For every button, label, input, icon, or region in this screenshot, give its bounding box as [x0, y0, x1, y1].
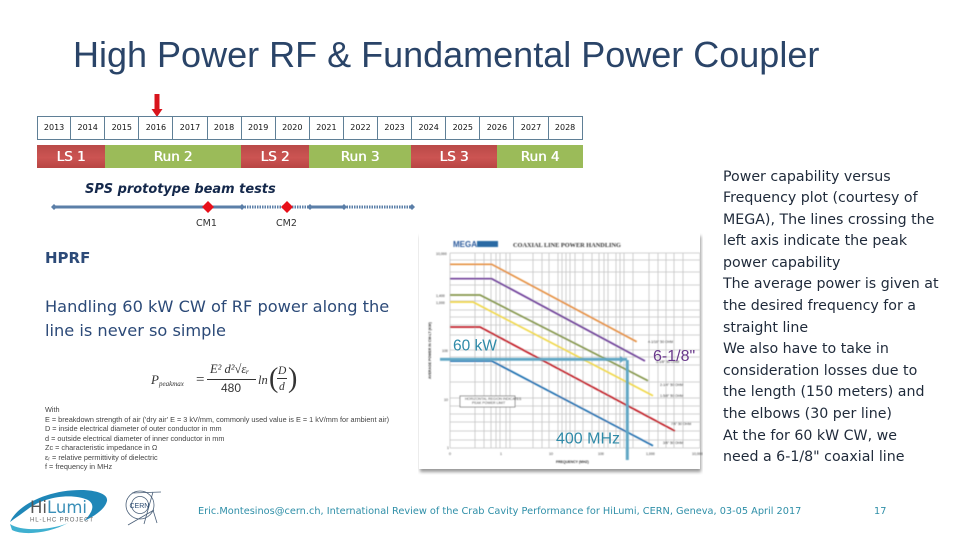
chart: coaxial line power handling: [418, 234, 703, 474]
phase bar: LS and Run periods: [37, 145, 583, 168]
timeline years: 2021: [316, 123, 337, 132]
text: handling statement: [45, 297, 389, 340]
timeline years: 2018: [214, 123, 234, 132]
phase bar: LS and Run periods: Run 2: [154, 149, 192, 165]
text: formula definitions: f = frequency in MHz: [45, 462, 112, 471]
chart: coaxial line power handling: 0: [449, 452, 451, 456]
formula: peak power: ln: [258, 373, 268, 387]
text: power capability description: [722, 168, 939, 465]
phase bar: LS and Run periods: LS 2: [260, 149, 289, 165]
chart: coaxial line power handling: 2-1/4" 50 OHM: [660, 383, 683, 387]
timeline years: 2019: [248, 123, 268, 132]
chart: coaxial line power handling: 10,000: [436, 252, 447, 256]
text: power capability description: left axis indicate the peak: [723, 233, 907, 249]
chart: coaxial line power handling: 400 MHz: [556, 430, 620, 448]
formula: peak power: E² d²√εᵣ: [209, 362, 249, 376]
text: power capability description: the elbows (30 per line): [723, 406, 892, 422]
chart: coaxial line power handling: 3/8" 50 OHM: [663, 441, 683, 445]
phase bar: LS and Run periods: LS 3: [440, 149, 468, 165]
chart: coaxial line power handling: 1: [500, 452, 502, 456]
phase bar: LS and Run periods: Run 4: [521, 149, 559, 165]
formula: peak power: 480: [221, 381, 241, 395]
text: formula definitions: εᵣ = relative permittivity of dielectric: [45, 453, 158, 462]
formula: peak power: [150, 362, 297, 395]
chart: coaxial line power handling: 1,400: [436, 294, 445, 298]
formula: peak power: (: [269, 363, 278, 394]
phase bar: LS and Run periods: LS 1: [56, 149, 85, 165]
chart: coaxial line power handling: 3-1/8" 50 OHM: [656, 360, 679, 364]
text: power capability description: Power capability versus: [723, 168, 891, 184]
label: CM1: CM1: [196, 218, 217, 229]
chart: coaxial line power handling: 100: [442, 349, 448, 353]
chart: coaxial line power handling: 10: [549, 452, 553, 456]
text: formula definitions: d = outside electrical diameter of inner conductor in mm: [45, 434, 224, 443]
arrow: current year marker: [152, 94, 162, 116]
milestone timeline: [51, 201, 415, 213]
timeline years: 2026: [487, 123, 507, 132]
text: formula definitions: [45, 405, 389, 471]
text: power capability description: need a 6-1/8" coaxial line: [723, 449, 904, 465]
chart: coaxial line power handling: COAXIAL LINE POWER HANDLING: [513, 242, 621, 249]
formula: peak power: D: [277, 365, 287, 377]
timeline years: 2020: [282, 123, 302, 132]
text: formula definitions: With: [45, 405, 60, 414]
text: power capability description: We also have to take in: [723, 341, 889, 357]
chart: coaxial line power handling: 10,000: [692, 452, 703, 456]
heading: SPS prototype beam tests: SPS prototype beam tests: [85, 182, 276, 197]
text: handling statement: Handling 60 kW CW of RF power along the: [45, 297, 389, 316]
formula: peak power: ): [288, 363, 297, 394]
text: formula definitions: Zc = characteristic impedance in Ω: [45, 443, 157, 452]
text: handling statement: line is never so simple: [45, 321, 226, 340]
logo: HiLumi: HiLumi: [30, 498, 87, 517]
chart: coaxial line power handling: 4-1/16" 50 OHM: [648, 340, 673, 344]
chart: coaxial line power handling: 6-1/8": [653, 348, 695, 365]
timeline years: 2023: [384, 123, 405, 132]
text: power capability description: consideration losses due to: [723, 363, 917, 379]
timeline years: 2028: [555, 123, 575, 132]
title: High Power RF & Fundamental Power Coupler: [73, 34, 819, 75]
timeline years: 2027: [521, 123, 541, 132]
footer: credit line: Eric.Montesinos@cern.ch, International Review of the Crab Cavity Performance for HiLumi, CERN, Geneva, 03-05 April 2017: [198, 506, 801, 517]
text: power capability description: MEGA), The lines crossing the: [723, 212, 934, 228]
logo: HiLumi: [10, 490, 108, 534]
chart: coaxial line power handling: 10: [444, 398, 448, 402]
formula: peak power: d: [279, 381, 285, 393]
chart: coaxial line power handling: 7/8" 50 OHM: [671, 422, 691, 426]
timeline years: 2014: [78, 123, 98, 132]
text: power capability description: the length (150 meters) and: [723, 384, 924, 400]
chart: coaxial line power handling: 100: [598, 452, 604, 456]
text: power capability description: power capability: [723, 255, 840, 271]
chart: coaxial line power handling: MEGA: [453, 240, 477, 249]
timeline years: 2016: [146, 123, 166, 132]
chart: coaxial line power handling: 1,000: [436, 301, 445, 305]
phase bar: LS and Run periods: Run 3: [341, 149, 379, 165]
timeline years: 2025: [453, 123, 473, 132]
logo: CERN: [126, 490, 161, 526]
timeline years: 2022: [350, 123, 371, 132]
text: power capability description: Frequency plot (courtesy of: [723, 190, 918, 206]
timeline years: 2017: [180, 123, 200, 132]
label: CM2: CM2: [276, 218, 297, 229]
text: power capability description: At the for 60 kW CW, we: [723, 428, 897, 444]
text: power capability description: the desired frequency for a: [723, 298, 916, 314]
timeline years: [37, 116, 583, 140]
page number: 17: [874, 506, 886, 517]
chart: coaxial line power handling: 60 kW: [453, 338, 497, 354]
chart: coaxial line power handling: PEAK POWER LIMIT: [472, 401, 506, 405]
text: power capability description: straight line: [723, 320, 808, 336]
chart: coaxial line power handling: HORIZONTAL REGION INDICATES: [465, 397, 522, 401]
timeline years: 2024: [418, 123, 439, 132]
chart: coaxial line power handling: 1,000: [646, 452, 655, 456]
text: formula definitions: D = inside electrical diameter of outer conductor in mm: [45, 424, 222, 433]
chart: coaxial line power handling: AVERAGE POWER IN CW-LT (KW): [428, 322, 432, 379]
chart: coaxial line power handling: 1-5/8" 50 OHM: [660, 394, 683, 398]
timeline years: 2015: [112, 123, 132, 132]
timeline years: 2013: [44, 123, 64, 132]
logo: HiLumi: HL-LHC PROJECT: [30, 518, 94, 524]
chart: coaxial line power handling: FREQUENCY (MHZ): [556, 460, 589, 464]
formula: peak power: =: [196, 372, 204, 388]
chart: coaxial line power handling: 1: [447, 446, 449, 450]
text: formula definitions: E = breakdown strength of air ('dry air' E = 3 kV/mm, commonly used value is E = 1 kV/mm for ambient air): [45, 415, 389, 424]
formula: peak power: peakmax: [158, 380, 185, 388]
heading: HPRF: HPRF: [45, 249, 90, 267]
logo: CERN: CERN: [130, 503, 149, 510]
formula: peak power: P: [150, 372, 159, 387]
text: power capability description: The average power is given at: [723, 276, 939, 292]
